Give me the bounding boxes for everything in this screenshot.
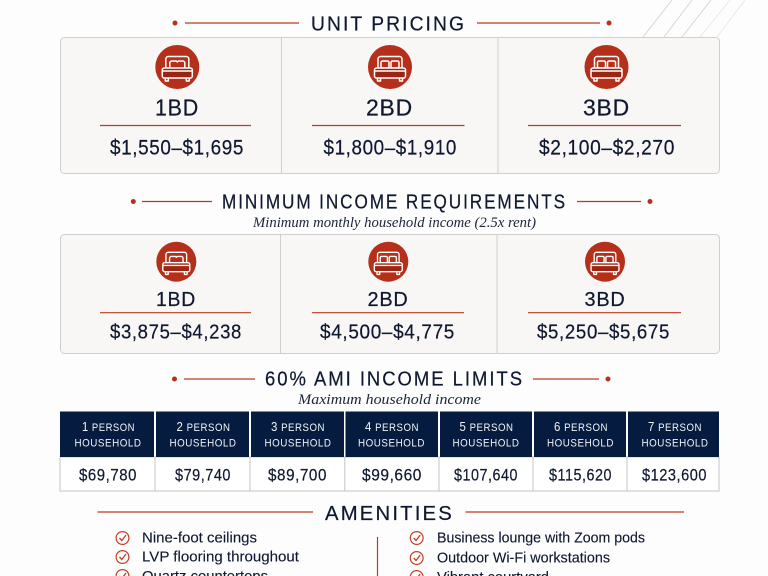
column: 4 person: $99,660 [362, 466, 422, 484]
column: 2 person: 2 PERSON [176, 419, 230, 434]
column: 1 person: HOUSEHOLD [74, 438, 142, 450]
amenities list: left column [116, 531, 299, 576]
card: 3BD income: $5,250–$5,675 [537, 321, 670, 343]
column: 2 person [156, 412, 249, 484]
card: 1BD income: 1BD [156, 288, 196, 311]
subtitle: minimum monthly income: Minimum monthly household income (2.5x rent) [252, 215, 536, 231]
column: 3 person: $89,700 [268, 466, 327, 484]
card: 3BD pricing: 3BD [583, 95, 630, 121]
card: 3BD pricing: $2,100–$2,270 [539, 136, 675, 160]
subtitle: maximum household income: Maximum household income [297, 392, 482, 408]
section: AMI income limits heading [172, 368, 610, 391]
column: 3 person: 3 PERSON [271, 419, 325, 434]
amenities list: right column: Outdoor Wi-Fi workstations [437, 551, 610, 567]
column: 4 person [346, 412, 438, 484]
column: 5 person: $107,640 [454, 466, 518, 484]
section: unit pricing heading: UNIT PRICING [311, 13, 466, 36]
card: 1BD pricing: 1BD [155, 95, 199, 121]
section: unit pricing heading [172, 13, 612, 36]
decorative diagonal lines [643, 0, 745, 37]
card: 3BD income: 3BD [584, 288, 626, 311]
column: 6 person: HOUSEHOLD [547, 438, 614, 450]
section: minimum income heading: MINIMUM INCOME REQUIREMENTS [222, 192, 567, 214]
card: 2BD income [312, 242, 464, 343]
column: 7 person [628, 412, 719, 484]
table: AMI income limits [60, 412, 719, 491]
column: 1 person: 1 PERSON [82, 419, 135, 434]
column: 4 person: HOUSEHOLD [358, 438, 425, 450]
card: 1BD income [100, 242, 251, 343]
amenities list: left column: LVP flooring throughout [142, 550, 299, 566]
column: 6 person: $115,620 [549, 466, 612, 484]
card: 2BD income: 2BD [368, 288, 408, 311]
card: 2BD pricing: $1,800–$1,910 [324, 136, 457, 160]
column: 7 person: HOUSEHOLD [642, 438, 708, 450]
column: 3 person [251, 412, 344, 484]
column: 2 person: HOUSEHOLD [170, 438, 236, 450]
column: 7 person: $123,600 [642, 466, 707, 484]
amenities column divider [376, 537, 378, 576]
column: 6 person: 6 PERSON [554, 419, 608, 434]
column: 2 person: $79,740 [175, 466, 231, 484]
column: 1 person [60, 412, 154, 484]
amenities list: right column [410, 531, 645, 576]
card: 3BD pricing [528, 45, 681, 160]
column: 6 person [534, 412, 626, 484]
card: 3BD income [528, 242, 681, 343]
column: 3 person: HOUSEHOLD [264, 438, 332, 450]
card: 1BD income: $3,875–$4,238 [110, 321, 242, 343]
section: AMI income limits heading: 60% AMI INCOME LIMITS [265, 368, 524, 391]
column: 5 person: HOUSEHOLD [452, 438, 520, 450]
column: 5 person [440, 412, 532, 484]
column: 4 person: 4 PERSON [365, 419, 419, 434]
panel: unit pricing [60, 38, 720, 174]
amenities list: right column: Business lounge with Zoom pods [437, 531, 645, 547]
card: 1BD pricing: $1,550–$1,695 [110, 136, 244, 160]
section: amenities heading: AMENITIES [325, 502, 454, 525]
card: 2BD income: $4,500–$4,775 [320, 321, 455, 343]
column: 1 person: $69,780 [79, 466, 137, 484]
card: 2BD pricing [312, 45, 464, 160]
card: 2BD pricing: 2BD [366, 95, 413, 121]
amenities list: left column: Nine-foot ceilings [142, 531, 257, 547]
column: 5 person: 5 PERSON [460, 419, 514, 434]
column: 7 person: 7 PERSON [648, 419, 702, 434]
card: 1BD pricing [100, 45, 251, 160]
panel: minimum income requirements [60, 234, 720, 354]
